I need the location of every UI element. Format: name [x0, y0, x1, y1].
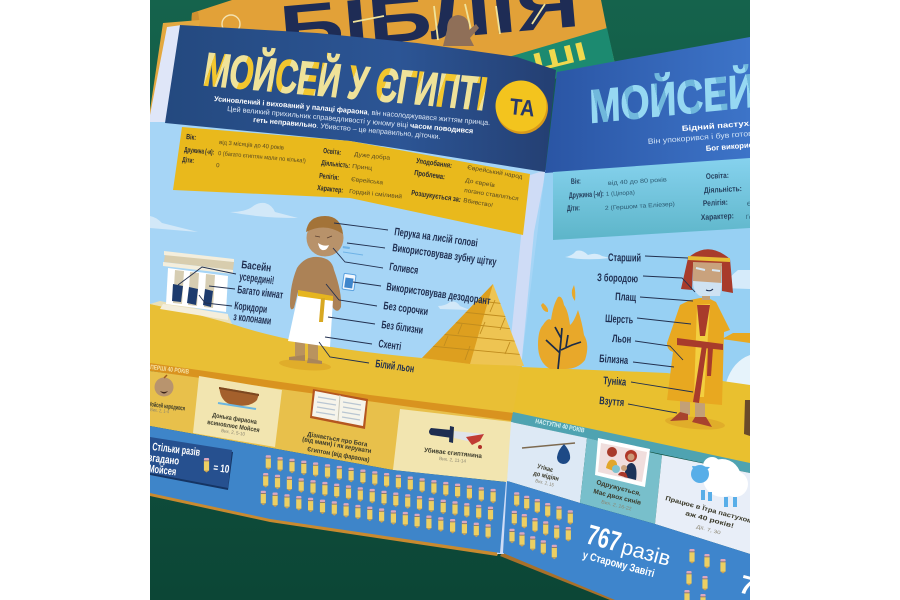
gutter	[512, 170, 546, 366]
tile: shepherd in Jethro's service	[655, 455, 754, 554]
left fact box: Гордий і сміливий	[349, 188, 402, 201]
tile: pharaoh's daughter adopts: всиновлює Мойсея	[207, 418, 260, 434]
right callout labels: Старший	[608, 252, 641, 265]
tile: flees to Midian: Вих. 2, 15	[535, 478, 555, 489]
counter box: Мойсея	[148, 463, 177, 478]
right intro paragraph: Бідний пастух,	[681, 119, 752, 133]
right fact box: Релігія:	[703, 198, 728, 208]
badge: ТА	[496, 80, 548, 134]
left fact box: 0	[216, 163, 220, 169]
page underlay for the gutter	[497, 170, 546, 554]
left fact box: Вік:	[186, 132, 197, 142]
right callout labels	[597, 252, 641, 409]
stat: 767 times	[581, 519, 758, 600]
stat: 767 times: разів	[619, 536, 673, 571]
temple illustration	[150, 251, 236, 324]
clouds left	[150, 203, 470, 310]
left fact box: Принц	[352, 164, 373, 172]
tile: flees to Midian: Утікає	[536, 462, 554, 474]
left fact box: Освіта:	[323, 146, 342, 157]
counter box: = 10	[213, 462, 230, 476]
pyramid	[422, 284, 526, 366]
tile: learns about God (open book): Дізнається про Бога	[307, 430, 368, 449]
right fact box: 2 (Гершом та Елiезер)	[605, 202, 675, 212]
tile: born	[150, 374, 185, 414]
temple labels	[233, 259, 284, 328]
tile: pharaoh's daughter adopts	[193, 376, 282, 447]
open book orange cover edge	[150, 20, 200, 115]
icon: deodorant	[342, 273, 356, 291]
left callout labels: Білий льон	[375, 358, 415, 375]
left page title: МОЙСЕЙ У ЄГИПТІ	[200, 42, 491, 120]
burning bush	[538, 285, 587, 369]
temple labels: усередині!	[239, 271, 275, 287]
right intro paragraph: Він упокорився і був готовий	[647, 128, 763, 146]
tile: shepherd in Jethro's service: Дії. 7, 30	[695, 524, 722, 537]
right callout labels: Білизна	[599, 353, 629, 367]
left fact box: Релігія:	[319, 171, 340, 182]
left fact box: Діяльність:	[321, 158, 351, 170]
left fact box: Уподобання:	[416, 156, 453, 170]
left callout lines	[319, 223, 388, 363]
left header band	[165, 25, 556, 172]
left callout labels: Голився	[389, 261, 419, 277]
background book cover	[190, 0, 615, 82]
counter box: Стільки разів	[152, 441, 201, 459]
right page ground	[513, 367, 750, 464]
left callout labels: Схенті	[378, 338, 402, 353]
pencil counter left	[261, 455, 496, 539]
timeline band: first 40 years	[150, 363, 514, 422]
photo area: green table with open book	[148, 0, 780, 600]
timeline band: first 40 years: ПЕРШІ 40 РОКІВ	[150, 364, 190, 376]
left fact box: погано ставляться	[464, 188, 519, 203]
left intro paragraph: геть неправильно. Убивство – це неправильно, діточки.	[253, 115, 441, 141]
right fact box: Гордий	[746, 213, 766, 221]
left fact box: Діти:	[182, 155, 195, 165]
stat: 767 times: у Старому Завіті	[581, 549, 656, 580]
right fact box: Діяльність:	[704, 184, 742, 195]
left callout labels: Без сорочки	[383, 300, 429, 318]
temple labels: Багато кімнат	[237, 284, 284, 302]
clouds right	[566, 250, 750, 385]
left fact box: Дружина (-и):	[184, 145, 214, 157]
tile: kills an Egyptian (dagger)	[393, 409, 512, 482]
left fact box: Проблема:	[414, 168, 446, 181]
tile: pharaoh's daughter adopts: Донька фараона	[212, 412, 258, 426]
right fact box: Освіта:	[706, 171, 729, 181]
tile: kills an Egyptian (dagger): Убиває єгиптянина	[424, 446, 483, 460]
right fact box	[553, 158, 750, 240]
left intro paragraph: Усиновлений і вихований у палаці фараона, він насолоджувався життям принца.	[214, 94, 491, 127]
left fact box: Розшукується за:	[411, 188, 461, 204]
right fact box: Вік:	[571, 176, 581, 186]
right intro paragraph	[648, 122, 750, 151]
left fact box: Вбивство!	[463, 198, 494, 209]
right callout labels: Шерсть	[605, 313, 634, 326]
figure: older Moses	[665, 249, 750, 432]
tree trunk at edge	[744, 400, 750, 436]
tile: marries, two sons: Вих. 2, 16-22	[601, 499, 632, 513]
right page sky	[522, 171, 750, 382]
background book cover: ШІ	[529, 35, 590, 78]
right blue band	[503, 481, 750, 600]
left callout labels: Без білизни	[381, 319, 424, 337]
tile: flees to Midian: до мідіян	[533, 469, 560, 483]
left blue band	[150, 426, 506, 553]
left callout labels: Використовував дезодорант	[386, 281, 492, 308]
right fact box: Характер:	[701, 211, 734, 222]
left fact box: 0 (багато єгиптян мали по кілька!)	[218, 151, 306, 165]
right callout labels: З бородою	[597, 272, 638, 285]
timeline band: next 40 years	[511, 412, 750, 473]
pencil counter right	[509, 492, 726, 600]
right fact box: 1 (Ціпора)	[606, 190, 635, 198]
left intro paragraph: Цей великий прихильник справедливості у юному віці часом поводився	[227, 104, 474, 135]
figure: young Moses	[279, 216, 344, 372]
icon: toothbrush	[343, 246, 363, 255]
tile: marries, two sons: Має двох синів	[593, 487, 642, 507]
right intro paragraph: Бог використав	[705, 139, 766, 153]
right callout lines	[628, 256, 695, 413]
left page ground	[150, 304, 522, 414]
right callout labels: Взуття	[599, 395, 625, 409]
counter box	[148, 437, 233, 490]
right fact box: Дружина (-и):	[569, 189, 604, 200]
tile: flees to Midian	[507, 422, 587, 503]
counter box: згадано	[148, 452, 180, 468]
left fact box	[173, 127, 530, 235]
left fact box: Характер:	[317, 183, 344, 195]
left fact box: Єврейська	[351, 176, 384, 186]
tile: pharaoh's daughter adopts: Вих. 2, 5-10	[221, 428, 246, 438]
left fact box: Дуже добра	[354, 152, 391, 162]
temple labels: Басейн	[241, 259, 272, 275]
left fact box: від 3 місяців до 40 років	[219, 140, 284, 152]
timeline tiles left	[150, 371, 512, 482]
right fact box: Діти:	[567, 203, 580, 213]
right callout labels: Туніка	[603, 375, 627, 389]
stat: 767 times: 767	[583, 519, 624, 558]
left callout labels: Використовував зубну щітку	[392, 242, 498, 269]
left page lavender edge	[150, 25, 182, 126]
right page title: МОЙСЕЙ	[589, 63, 755, 133]
tile: marries, two sons	[580, 438, 662, 524]
timeline band: next 40 years: НАСТУПНІ 40 РОКІВ	[535, 418, 585, 435]
tile: marries, two sons: Одружується.	[595, 479, 642, 498]
temple labels: з колонами	[233, 311, 272, 328]
left fact box: До євреїв	[465, 178, 495, 189]
tile: shepherd in Jethro's service: аж 40 років!	[684, 509, 735, 530]
right fact box: від 40 до 80 років	[608, 177, 667, 187]
left page sky	[150, 122, 544, 360]
tile: born: Вих. 2, 1-4	[150, 407, 170, 415]
badge: ТА: ТА	[508, 93, 536, 122]
left callout labels: Перука на лисій голові	[394, 226, 478, 250]
right callout labels: Льон	[612, 333, 631, 346]
tile: learns about God (open book): Єгиптом (від фараона)	[307, 445, 370, 464]
left fact box: Єврейський народ	[467, 164, 524, 181]
tile: learns about God (open book): (від мами) і як керувати	[302, 435, 372, 455]
tile: born: Мойсей народився	[148, 400, 186, 413]
tile: shepherd in Jethro's service: Працює в Їтра пастухом	[664, 494, 754, 525]
tile: kills an Egyptian (dagger): Вих. 2, 11-14	[439, 456, 467, 465]
right callout labels: Плащ	[615, 291, 637, 304]
temple labels: Коридори	[234, 300, 268, 316]
left callout labels	[375, 226, 498, 375]
right fact box: Єврейський	[747, 199, 780, 208]
tile: learns about God (open book)	[302, 389, 372, 464]
right header band	[545, 37, 750, 173]
